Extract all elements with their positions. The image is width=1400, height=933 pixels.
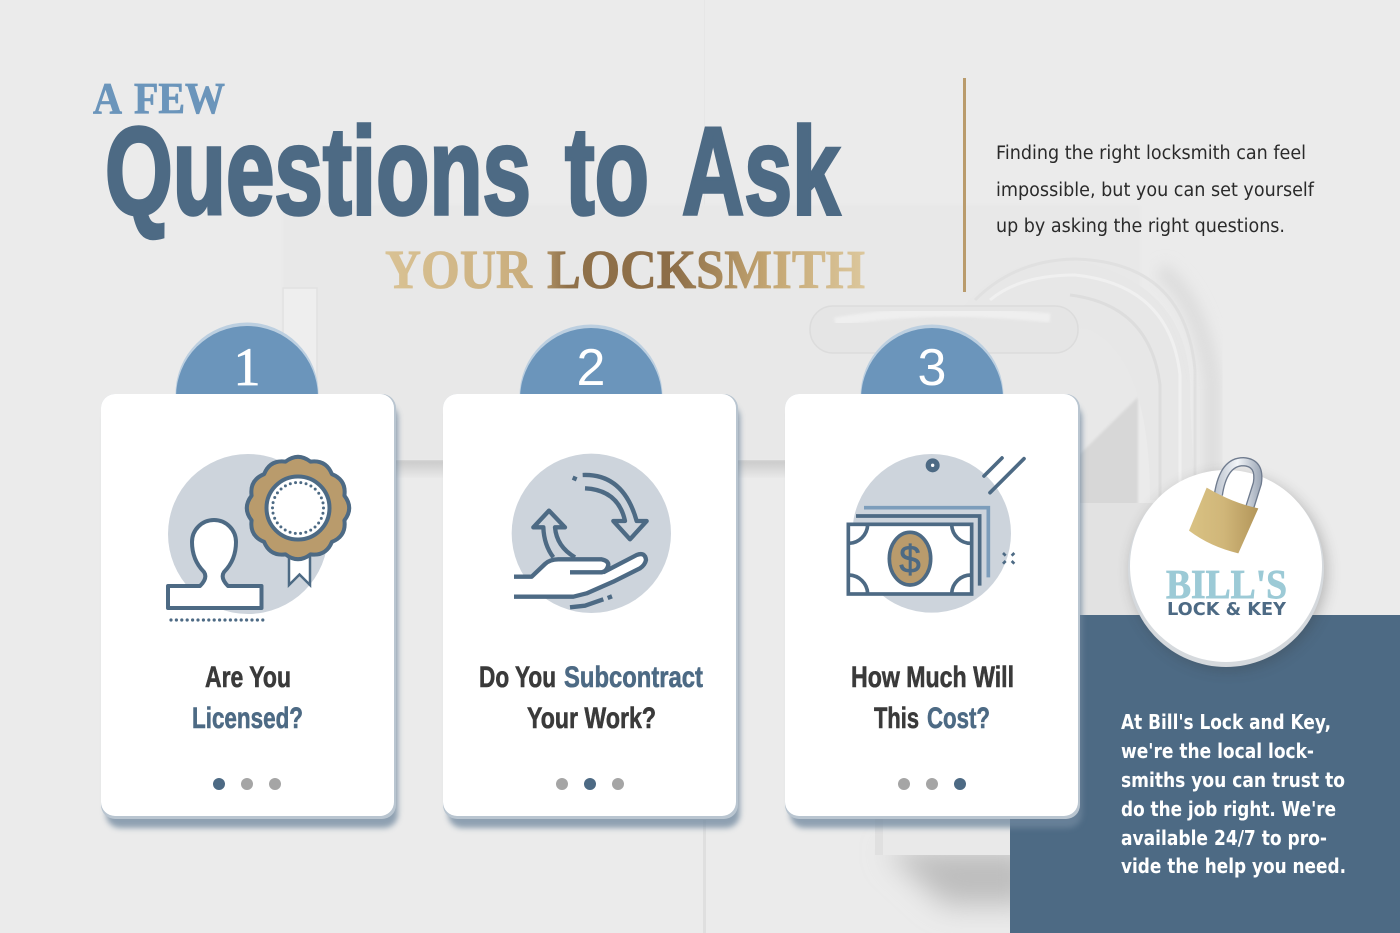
card 1 question: Licensed? (192, 702, 303, 735)
icon: banknote: $ (899, 538, 921, 581)
title: questions to ask: Questions (105, 103, 531, 241)
title: your locksmith: YOUR (385, 239, 533, 300)
card 1 pagination dots (213, 778, 281, 790)
icon: stamp and seal (168, 454, 349, 620)
divider line (963, 78, 966, 292)
card 2 (443, 394, 740, 828)
title: a few: A (93, 74, 122, 123)
company description text: vide the help you need. (1121, 854, 1346, 878)
intro text: Finding the right locksmith can feel (996, 143, 1306, 164)
company description text: we're the local lock- (1121, 739, 1314, 763)
card 3 pagination dots (898, 778, 966, 790)
number badge 3: 3 (918, 339, 946, 397)
title: a few (93, 74, 225, 123)
company description text (1121, 710, 1346, 878)
number badge 3 (860, 324, 1004, 470)
icon: hand with cycle arrows (512, 454, 671, 613)
company description text: do the job right. We're (1121, 797, 1336, 821)
card 3 question: This (874, 702, 919, 735)
title: your locksmith (385, 239, 865, 300)
title: questions to ask: to (565, 103, 649, 241)
logo wordmark: BILL'S (1166, 561, 1287, 607)
title: your locksmith: LOCKSMITH (547, 239, 865, 300)
intro text (996, 143, 1314, 237)
card 3 question: How Much Will (851, 661, 1014, 694)
number badge 1 (176, 322, 318, 468)
number badge 2: 2 (577, 339, 605, 397)
panel: company description background (1010, 615, 1400, 933)
company description text: available 24/7 to pro- (1121, 826, 1327, 850)
intro text: up by asking the right questions. (996, 216, 1285, 237)
card 2 question: Do You (479, 661, 556, 694)
card 2 question: Your Work? (527, 702, 656, 735)
card 2 question: Subcontract (564, 661, 703, 694)
card 2 pagination dots (556, 778, 624, 790)
title: questions to ask: Ask (682, 103, 841, 241)
logo badge (1128, 462, 1327, 670)
card 1 question: Are You (205, 661, 291, 694)
card 3 question: Cost? (927, 702, 990, 735)
intro text: impossible, but you can set yourself (996, 180, 1314, 201)
title: a few: FEW (134, 74, 225, 123)
card 2 question (479, 661, 703, 735)
icon: padlock (1189, 462, 1258, 553)
icon: banknote (848, 454, 1024, 613)
card 3 question (851, 661, 1014, 735)
number badge 2 (520, 324, 662, 470)
company description text: smiths you can trust to (1121, 768, 1345, 792)
number badge 1: 1 (234, 337, 260, 397)
logo wordmark: LOCK & KEY (1167, 600, 1286, 620)
company description text: At Bill's Lock and Key, (1121, 710, 1331, 734)
card 1 (101, 394, 398, 828)
card 1 question (192, 661, 303, 735)
card 3 (785, 394, 1082, 828)
